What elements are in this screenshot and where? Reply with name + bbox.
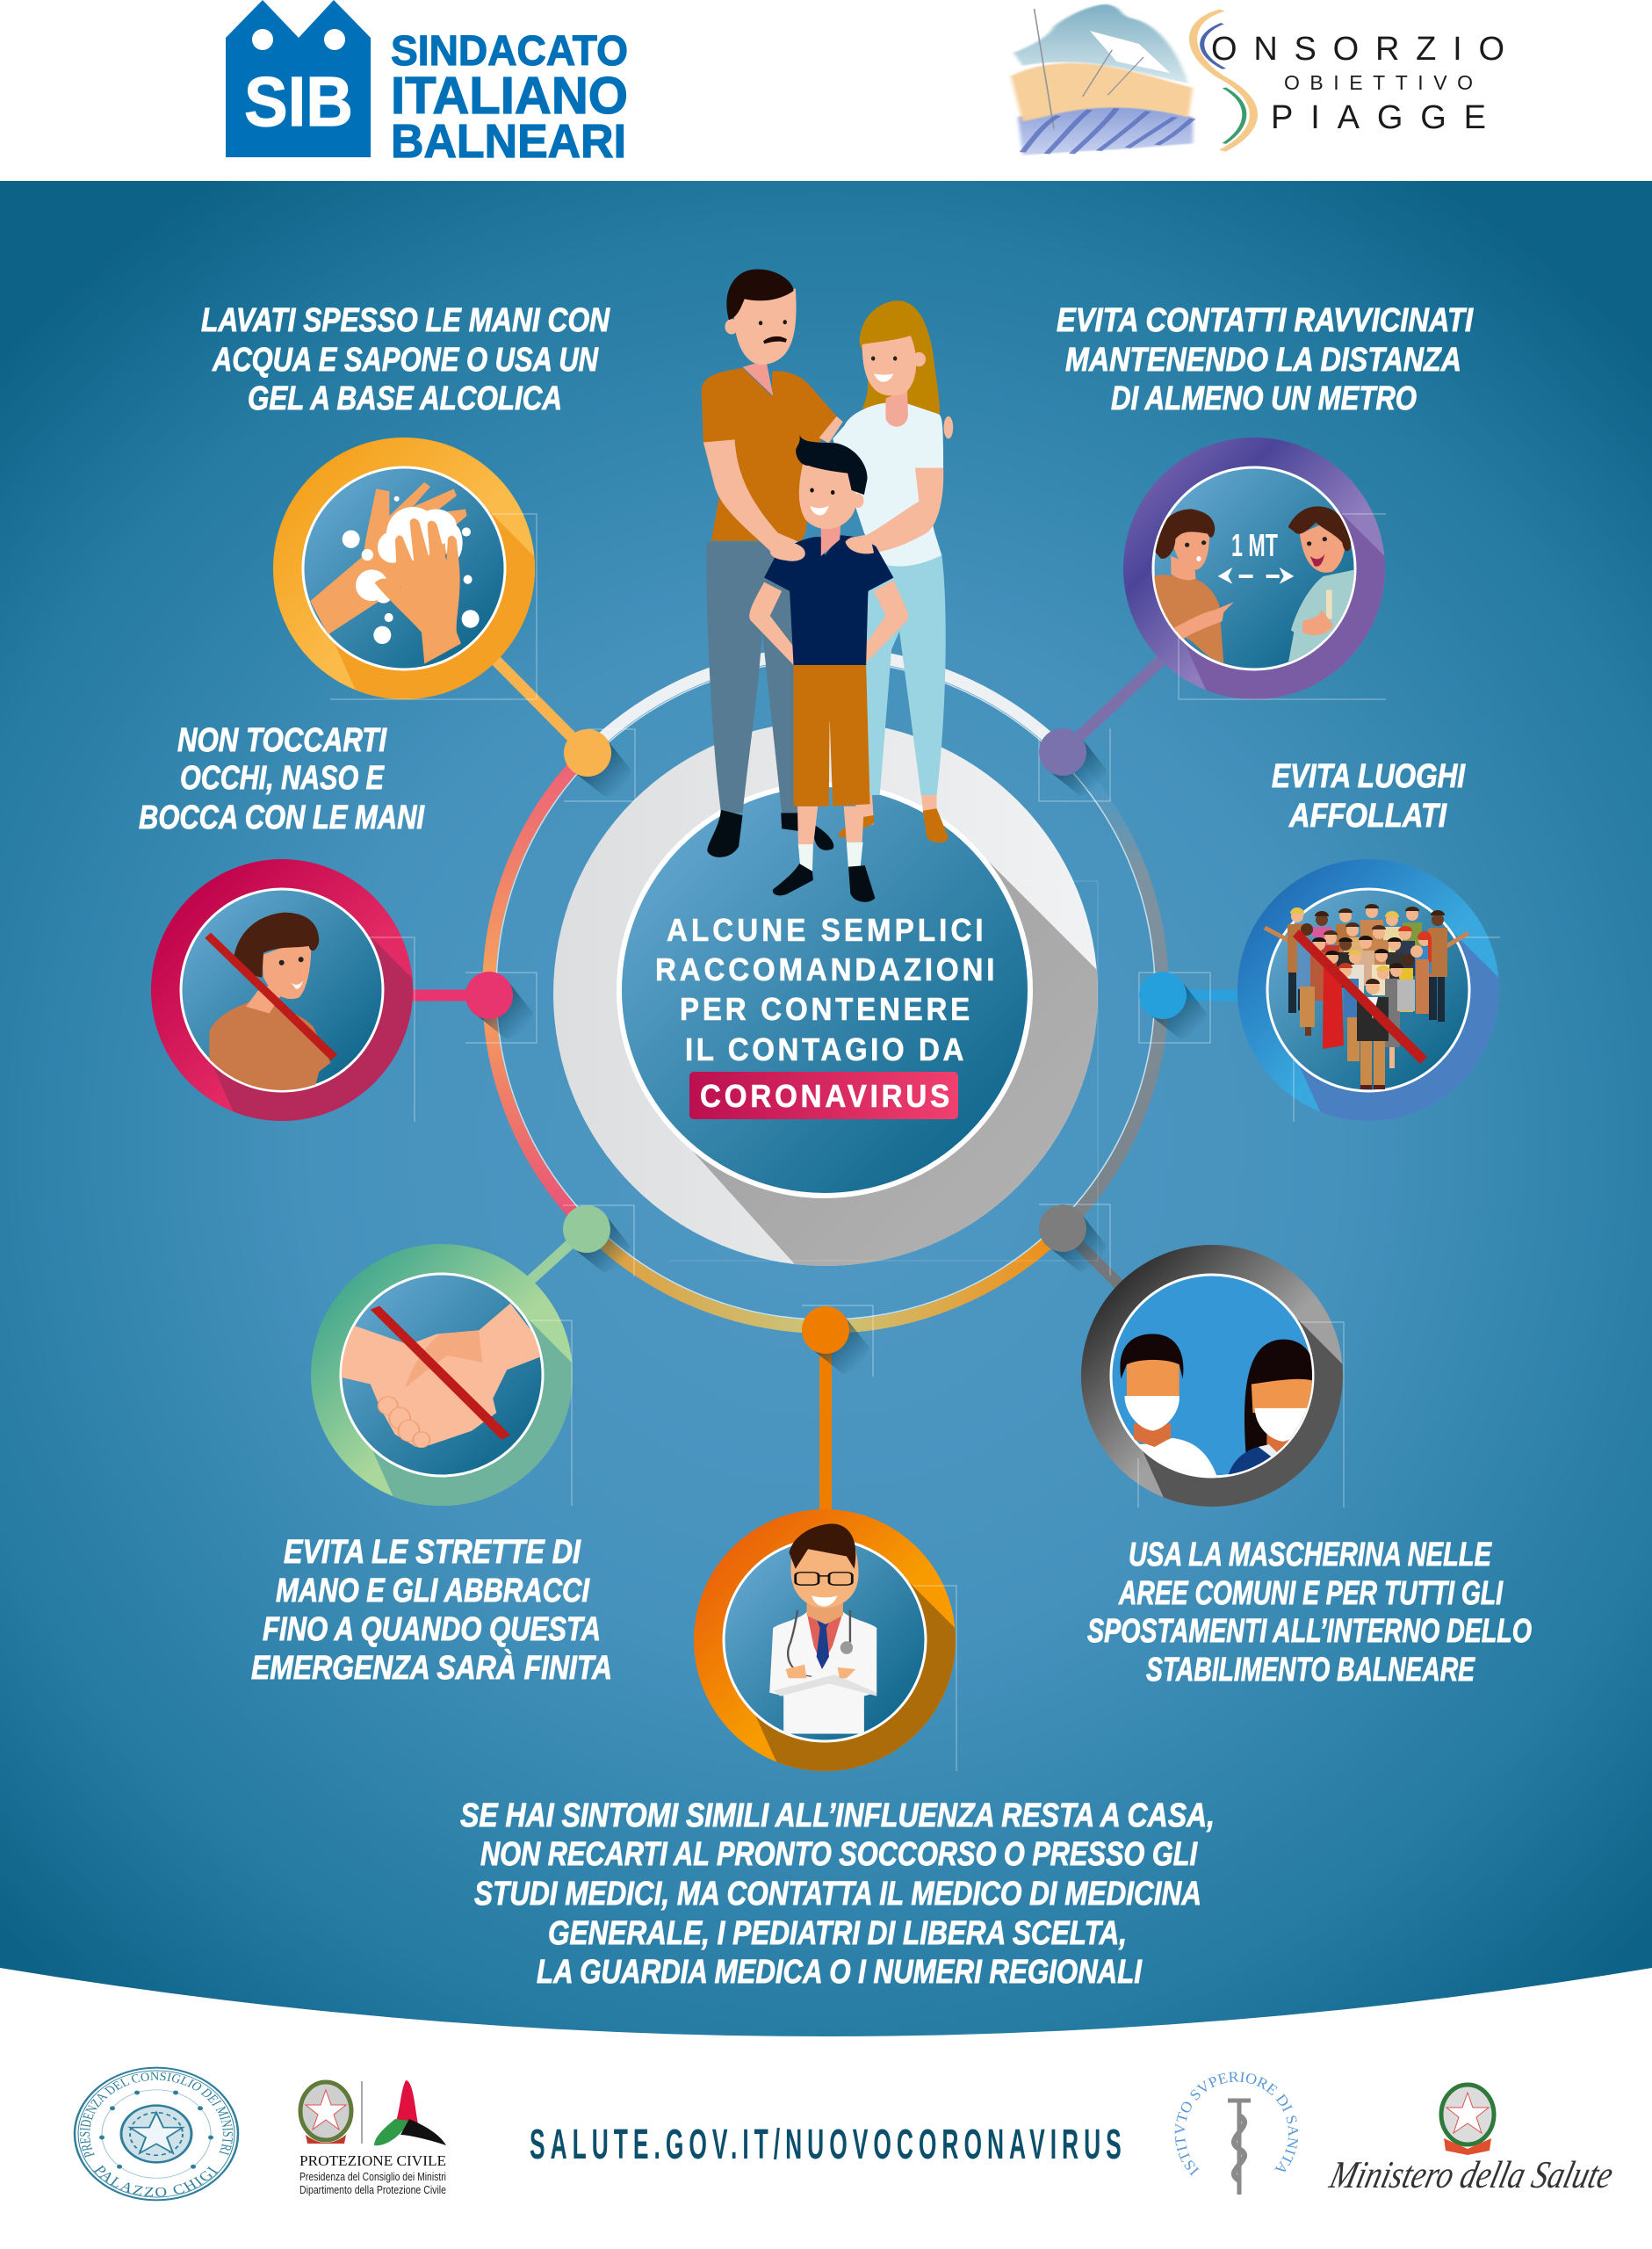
text: [139, 722, 425, 836]
text: [201, 302, 610, 417]
text: SE HAI SINTOMI SIMILI ALL’INFLUENZA RESTA A CASA,: [460, 1797, 1215, 1834]
footer logo: Presidenza del Consiglio seal: PALAZZO CHIGI: [93, 2165, 218, 2196]
panel: use mask: [1081, 1245, 1532, 1761]
panel: wash hands: [201, 307, 610, 699]
icon: two people one metre apart: [1153, 506, 1355, 664]
mother: [833, 300, 953, 842]
icon: red strike: [205, 933, 337, 1060]
ring left segment: [489, 752, 588, 1228]
window right: [324, 29, 345, 50]
footer logo: Presidenza del Consiglio seal: PRESIDENZA DEL CONSIGLIO DEI MINISTRI: [79, 2072, 234, 2158]
badge: coronavirus: [689, 1072, 958, 1119]
heading: central text: RACCOMANDAZIONI: [655, 953, 994, 987]
text: [460, 1797, 1215, 1991]
parents' hands on shoulders: [770, 537, 874, 561]
fourth row: [1300, 949, 1414, 1049]
text: LAVATI SPESSO LE MANI CON: [201, 302, 610, 339]
wordmark: OBIETTIVO: [1284, 71, 1473, 94]
footer logo: Istituto Superiore di Sanità: ISTITVTO SVPERIORE DI SANITA: [1175, 2072, 1298, 2176]
text: [251, 1534, 612, 1687]
heading: central text: ALCUNE SEMPLICI: [667, 914, 984, 948]
text: BOCCA CON LE MANI: [139, 799, 425, 836]
ring bottom segment: [588, 1228, 1064, 1327]
text: STUDI MEDICI, MA CONTATTA IL MEDICO DI MEDICINA: [474, 1876, 1201, 1913]
front man: [1357, 979, 1389, 1089]
node: face: [465, 972, 537, 1043]
ring: [1081, 1245, 1511, 1761]
central disc: [553, 721, 1098, 1266]
man: [1109, 1334, 1223, 1495]
text: AFFOLLATI: [1288, 798, 1447, 835]
connector lines: [386, 639, 1265, 1529]
text: LA GUARDIA MEDICA O I NUMERI REGIONALI: [537, 1954, 1143, 1991]
text: EVITA LUOGHI: [1272, 758, 1466, 795]
ring: [311, 1244, 738, 1757]
wordmark: ITALIANO: [391, 67, 628, 125]
badge: coronavirus: CORONAVIRUS: [700, 1080, 949, 1114]
subtitle: Presidenza del Consiglio dei Ministri: [299, 2170, 446, 2183]
icon: S curve: [1194, 11, 1253, 151]
panel: no handshake: [251, 1244, 611, 1680]
text: DI ALMENO UN METRO: [1111, 380, 1417, 417]
icon: red strike: [1293, 929, 1427, 1064]
heading: central text: IL CONTAGIO DA: [685, 1033, 963, 1067]
wordmark: PROTEZIONE CIVILE: [299, 2152, 446, 2169]
ring: [151, 859, 415, 1122]
subtitle: [299, 2170, 446, 2196]
icon: crowd: [1265, 904, 1468, 1089]
text: GENERALE, I PEDIATRI DI LIBERA SCELTA,: [548, 1915, 1127, 1952]
logo: Consorzio Obiettivo Piagge: [1011, 4, 1504, 155]
outer legs: [1288, 966, 1445, 1022]
icon: person touching face: [209, 913, 331, 1094]
footer logo: Ministero della Salute: [1325, 2085, 1618, 2196]
icon: emblem: [1441, 2085, 1494, 2155]
arrows: [1218, 568, 1294, 584]
wordmark: PIAGGE: [1271, 99, 1486, 136]
text: EMERGENZA SARÀ FINITA: [251, 1648, 612, 1687]
text: AREE COMUNI E PER TUTTI GLI: [1118, 1575, 1504, 1612]
text: [1087, 1537, 1532, 1689]
ring: [273, 438, 537, 699]
panel: avoid crowds: [1237, 763, 1500, 1122]
node: distance: [1039, 728, 1110, 801]
wordmark: SINDACATO: [391, 28, 628, 75]
panel: keep distance: [1057, 307, 1474, 699]
ring: [694, 1509, 1124, 2025]
text: NON RECARTI AL PRONTO SOCCORSO O PRESSO GLI: [480, 1836, 1198, 1873]
woman: [1225, 1340, 1319, 1488]
text: STABILIMENTO BALNEARE: [1146, 1652, 1475, 1689]
footer logo: Presidenza del Consiglio seal: [74, 2066, 239, 2202]
back row: [1288, 904, 1447, 977]
subtitle: Dipartimento della Protezione Civile: [299, 2183, 446, 2196]
second row: [1297, 922, 1432, 989]
text: GEL A BASE ALCOLICA: [248, 380, 562, 417]
window left: [252, 29, 273, 50]
outer grey disc: [553, 721, 1098, 1266]
text: ACQUA E SAPONE O USA UN: [212, 342, 599, 379]
third row: [1310, 936, 1429, 1014]
family illustration: [702, 270, 953, 902]
left person: [1153, 509, 1234, 664]
text: FINO A QUANDO QUESTA: [263, 1611, 601, 1648]
faint frame: [669, 881, 1098, 1261]
text: NON TOCCARTI: [177, 722, 387, 759]
ring top segment: [588, 654, 1064, 752]
label: 1 MT: 1 MT: [1231, 527, 1278, 563]
boy: [749, 434, 908, 902]
wordmark: ONSORZIO: [1211, 31, 1504, 68]
heading: central text: PER CONTENERE: [680, 993, 970, 1027]
stars: [99, 2091, 213, 2169]
panel: symptoms / doctor: [460, 1509, 1215, 2025]
wordmark: BALNEARI: [391, 115, 626, 168]
text: OCCHI, NASO E: [180, 760, 385, 797]
SIB letters: SIB: [244, 62, 353, 141]
ring: [1123, 438, 1386, 699]
wordmark: [391, 28, 628, 168]
front row: [1338, 963, 1415, 1068]
node: mask: [1039, 1204, 1110, 1276]
footer logo: Protezione Civile: [299, 2080, 446, 2196]
wordmark: [1211, 31, 1504, 136]
icon: sail and sea artwork: [1011, 4, 1193, 155]
node: doctor: [802, 1305, 873, 1377]
text: MANTENENDO LA DISTANZA: [1065, 342, 1461, 379]
inner blue circle: [619, 785, 1030, 1196]
icon: red strike: [371, 1306, 510, 1440]
icon: emblem: [300, 2082, 351, 2144]
node: crowd: [1139, 972, 1210, 1043]
central ring: [489, 654, 1162, 1327]
text: EVITA CONTATTI RAVVICINATI: [1057, 302, 1474, 339]
text: MANO E GLI ABBRACCI: [276, 1573, 590, 1609]
text: USA LA MASCHERINA NELLE: [1129, 1537, 1492, 1573]
heading: central text: [655, 914, 994, 1119]
ring right segment: [1064, 752, 1162, 1228]
icon: washing hands: [310, 482, 480, 664]
panel: do not touch face: [139, 727, 425, 1122]
icon: handshake: [332, 1304, 549, 1448]
node: handshake: [563, 1205, 634, 1276]
right person: [1288, 506, 1355, 664]
text: [1057, 302, 1474, 417]
icon: doctor: [769, 1523, 876, 1734]
website url: SALUTE.GOV.IT/NUOVOCORONAVIRUS: [530, 2122, 1122, 2168]
logo: Sindacato Italiano Balneari: [226, 0, 628, 168]
node: hand: [564, 729, 635, 801]
icon: flag triangle: [374, 2080, 446, 2145]
icon: two people with masks: [1109, 1334, 1319, 1495]
icon: SIB building: [226, 0, 371, 157]
father: [702, 270, 843, 857]
long shadow: [692, 860, 1098, 1266]
text: EVITA LE STRETTE DI: [284, 1534, 581, 1571]
ring: [1237, 859, 1500, 1122]
text: [1272, 758, 1466, 835]
